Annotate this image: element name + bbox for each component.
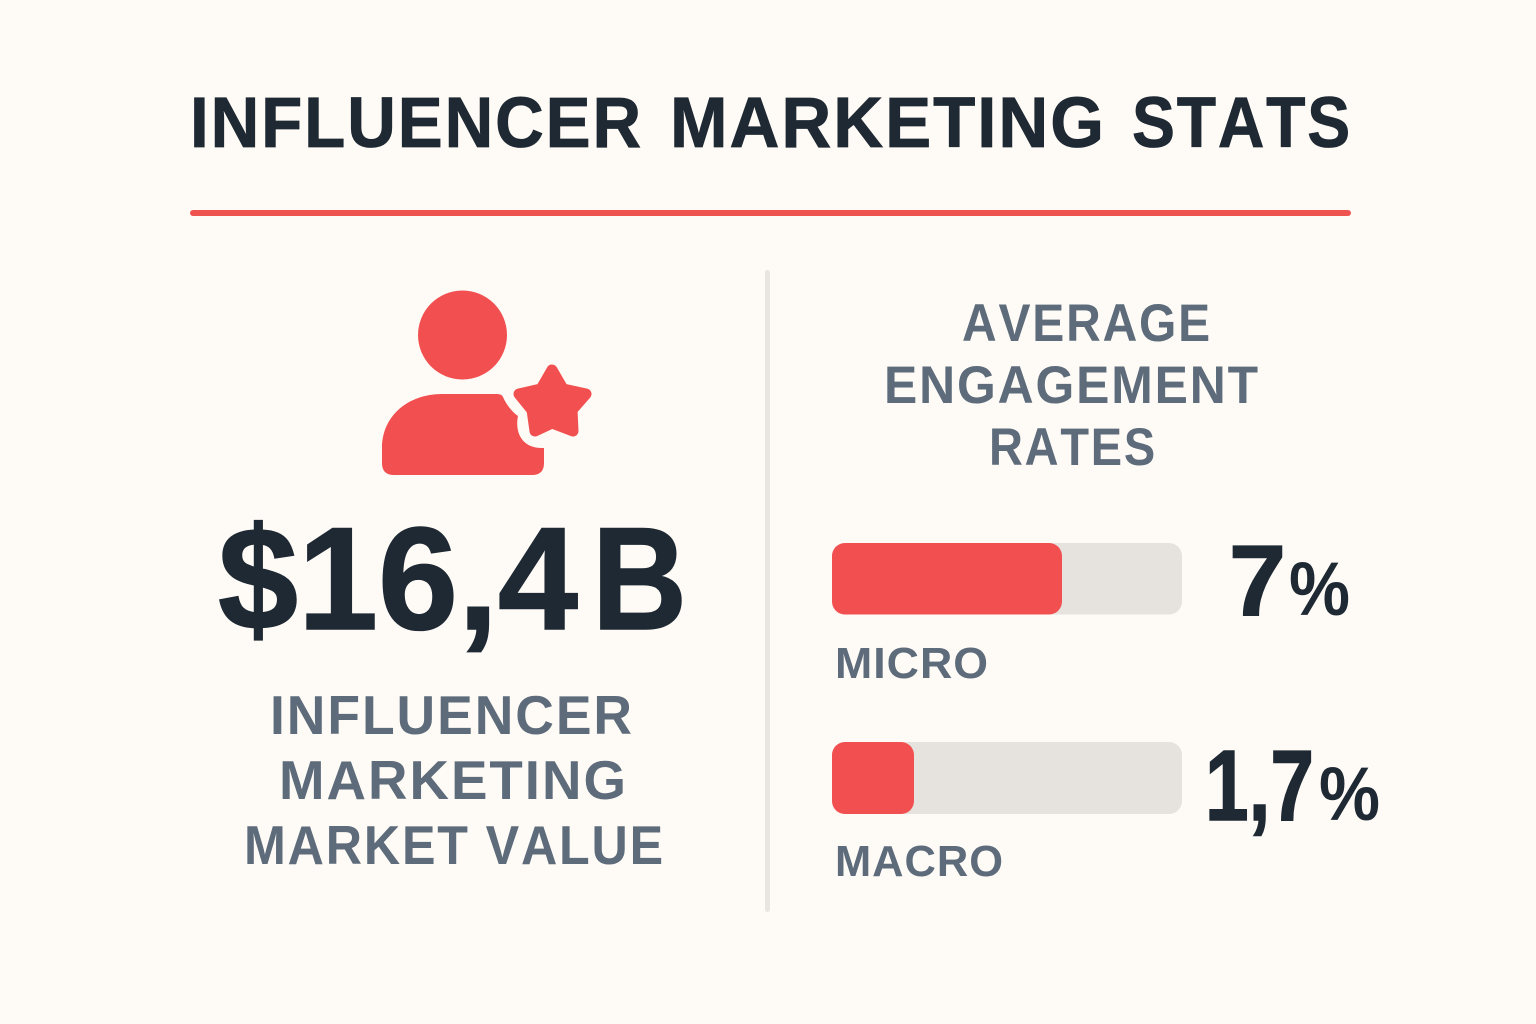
engagement heading: ENGAGEMENT (884, 356, 1260, 415)
title: STATS (1132, 84, 1352, 163)
market value figure: B (592, 497, 687, 660)
engagement heading: AVERAGE (962, 294, 1212, 353)
bar: macro (832, 742, 1182, 814)
title: MARKETING (670, 84, 1106, 163)
label: macro: MACRO (835, 837, 1004, 886)
market value label: MARKET VALUE (244, 814, 665, 876)
title (190, 84, 1352, 163)
engagement heading (884, 294, 1260, 477)
market value label (244, 684, 665, 876)
title underline (190, 210, 1351, 216)
panel: engagement rates (832, 294, 1380, 886)
market value figure: $16,4 (218, 497, 578, 660)
value: macro 1,7%: 1,7 (1205, 730, 1314, 842)
panel: market value (218, 290, 687, 876)
market value label: MARKETING (279, 749, 628, 811)
title: INFLUENCER (190, 84, 643, 163)
engagement heading: RATES (989, 418, 1157, 477)
icon: influencer with star (382, 290, 586, 475)
panel divider (765, 270, 770, 912)
value: macro 1,7%: % (1319, 752, 1380, 837)
label: micro: MICRO (835, 639, 989, 688)
value: micro 7%: % (1289, 547, 1350, 632)
value: micro 7% (1229, 525, 1350, 637)
bar: micro (832, 543, 1182, 614)
value: micro 7%: 7 (1229, 525, 1286, 637)
market value label: INFLUENCER (270, 684, 634, 746)
